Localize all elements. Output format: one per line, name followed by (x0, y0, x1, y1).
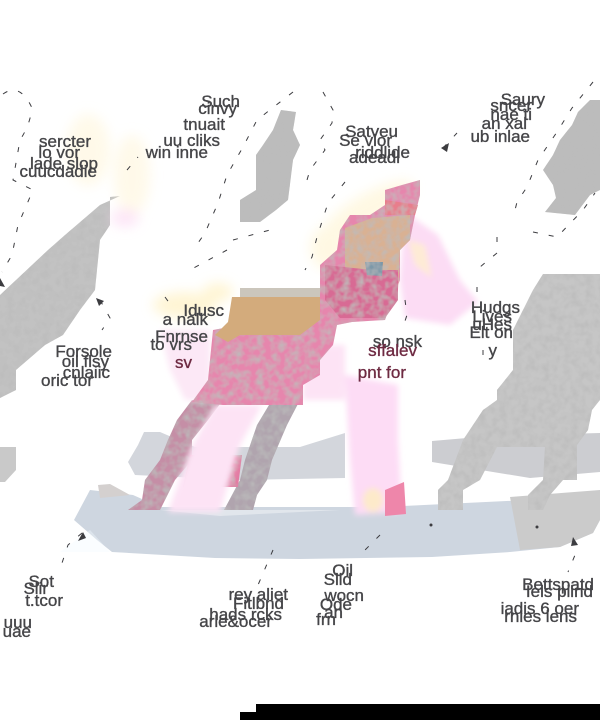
gray figure top centre (240, 110, 300, 222)
pale front leg and pale head (160, 212, 478, 515)
gray figure top right (543, 100, 600, 215)
callout text top right: nae ti (490, 105, 532, 124)
callout text centre on saddle: Fnrnse (155, 327, 208, 346)
callout text bottom right: Iels piind (526, 582, 593, 601)
callout text bottom centre: hads rcks (209, 605, 282, 624)
callout text bottom centre: rey aliet (228, 585, 288, 604)
callout text top centre: tnuait (183, 115, 225, 134)
callout text top right: an xal (482, 114, 527, 133)
callout text bottom middle: frn (316, 610, 336, 629)
callout text bottom left: Slir (23, 579, 48, 598)
callout text top centre: uu cliks (163, 131, 220, 150)
callout text upper middle: adeadl (349, 148, 400, 167)
callout text right: y (488, 341, 498, 360)
callout text bottom right: iadis 6 oer (501, 599, 579, 618)
callout text top centre: Such (201, 92, 240, 111)
callout text top right: sncer (490, 96, 532, 115)
callout text bottom left (3, 572, 63, 641)
dashed callout lines (2, 82, 595, 585)
callout text bottom right: Bettspatd (522, 575, 594, 594)
callout text bottom middle: Slid (324, 570, 352, 589)
callout text lower left: oil flsy (62, 352, 109, 371)
callout text bottom left: uae (3, 622, 31, 641)
callout text upper middle: riddlide (355, 143, 410, 162)
callout text top right: ub inlae (470, 127, 530, 146)
callout text right (470, 298, 520, 360)
callout text top left (19, 132, 98, 181)
callout text top centre: win inne (145, 143, 208, 162)
callout text upper middle: Se vior (339, 131, 392, 150)
callout text right: Lives (472, 307, 512, 326)
left edge grey rocker (0, 447, 16, 482)
callout text bottom middle: wocn (323, 586, 364, 605)
callout text right: Elt on (470, 323, 513, 342)
callout text bottom centre (199, 585, 288, 631)
upper rocker centre and right (128, 432, 600, 480)
callout text top right (470, 90, 545, 146)
callout text right: Hudgs (471, 298, 520, 317)
callout text right: uHes (472, 315, 512, 334)
callout text bottom middle: Oil (332, 561, 353, 580)
pale mane left (66, 114, 150, 227)
callout text top left: cuucdadie (19, 162, 97, 181)
pale mane behind horse neck (153, 170, 421, 318)
horse saddle (215, 288, 320, 342)
callout text bottom left: uuu (4, 613, 32, 632)
callout text bottom left: Sot (28, 572, 54, 591)
callout text top centre: cinvy (198, 99, 237, 118)
callout text lower left: oric tor (41, 371, 93, 390)
callout text top left: lo vor (38, 143, 80, 162)
black footer bar (240, 704, 600, 720)
callout text lower left: cnlaiic (63, 363, 110, 382)
callout text on horse belly (358, 332, 422, 382)
callout text top left: sercter (39, 132, 91, 151)
callout text bottom middle: Ode (320, 595, 352, 614)
callout text on horse belly: pnt for (358, 363, 406, 382)
callout text centre on saddle (150, 301, 224, 372)
gray horse head left (0, 196, 120, 398)
horse body and neck (192, 180, 420, 405)
callout text bottom middle (316, 561, 364, 629)
callout text bottom centre: arle&ocer (199, 612, 272, 631)
callout text bottom right (501, 575, 594, 626)
horse hoof accent (385, 482, 406, 516)
arrowheads and dots (0, 143, 578, 546)
gray horse right (438, 274, 600, 510)
callout text on horse belly: so nsk (373, 332, 422, 351)
callout text upper middle (339, 122, 410, 167)
callout text centre on saddle: to vrs (150, 335, 192, 354)
callout text lower left (41, 342, 112, 390)
horse far legs (128, 400, 300, 510)
callout text bottom centre: Fitlbnd (233, 594, 284, 613)
callout text lower left: Forsole (55, 342, 112, 361)
callout text bottom right: rnies lens (504, 607, 577, 626)
callout text centre on saddle: Idusc (183, 301, 224, 320)
callout text centre on saddle: a nalk (163, 310, 208, 329)
callout text top left: lade slop (30, 154, 98, 173)
callout text top centre (145, 92, 240, 162)
callout text upper middle: Satveu (345, 122, 398, 141)
callout text on horse belly: sffalev (368, 341, 417, 360)
callout text bottom left: t.tcor (25, 591, 63, 610)
callout text bottom middle: an (324, 603, 343, 622)
main rocker (60, 484, 600, 559)
callout text top right: Saury (501, 90, 545, 109)
callout text centre on saddle: sv (175, 353, 192, 372)
